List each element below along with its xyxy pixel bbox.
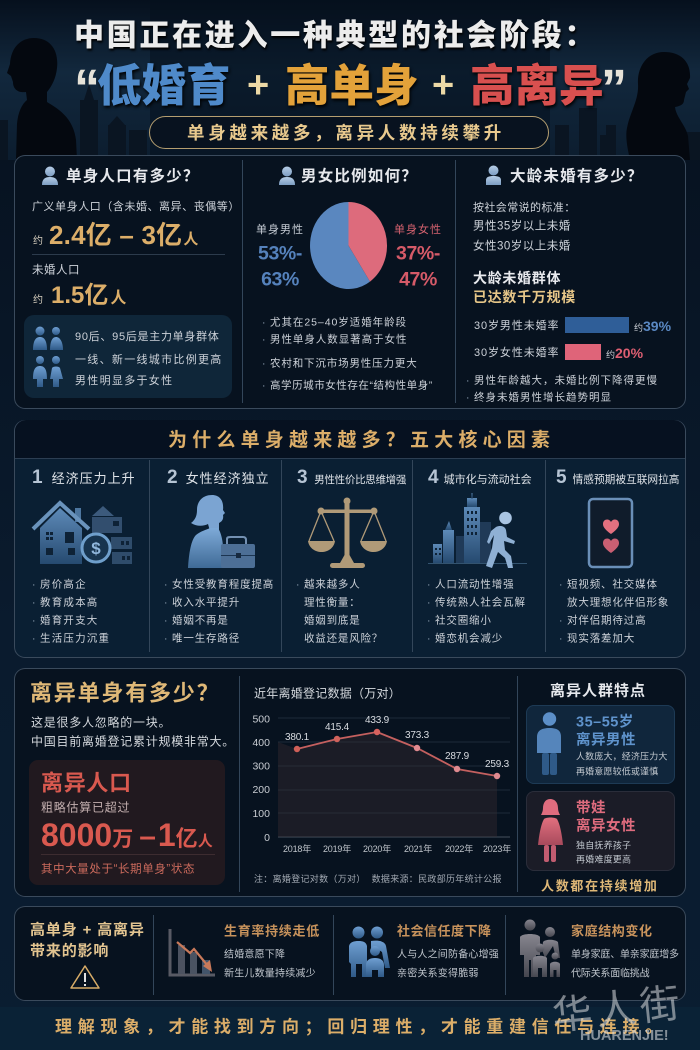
callout: main single groups: [24, 315, 232, 398]
factor 5 bullets: 对伴侣期待过高: [567, 614, 646, 626]
factor 1 bullets: ·: [32, 632, 37, 644]
bullet: men decline slowly: 男性年龄越大，未婚比例下降得更慢: [474, 374, 658, 386]
factor 4 bullets: ·: [427, 632, 431, 644]
stat: men percent: [258, 242, 302, 290]
text: unmarried population: 未婚人口: [32, 265, 80, 277]
impact 3 title: 家庭结构变化: [571, 924, 653, 939]
label: male rate: 30岁男性未婚率: [474, 320, 559, 332]
factor 1 bullets: ·: [32, 614, 37, 626]
text: city ratio: 一线、新一线城市比例更高: [75, 354, 223, 366]
keyword: low marriage and birth: 低婚育: [97, 62, 231, 111]
factor 3 bullets: 婚姻到底是: [304, 614, 360, 626]
bullet: lifelong unmarried men: 终身未婚男性增长趋势明显: [474, 392, 612, 404]
callout note: 其中大量处于“长期单身”状态: [41, 864, 195, 876]
impact 3 text: 单身家庭、单亲家庭增多: [571, 949, 679, 960]
impact 1 text: [224, 945, 316, 983]
impact 3 text: 代际关系面临挑战: [571, 968, 649, 979]
impact 2 text: [397, 945, 499, 983]
factor 4 bullets: 传统熟人社会瓦解: [435, 596, 526, 608]
factor 5 bullets: [559, 578, 669, 644]
factor 1 header: 1 经济压力上升: [32, 467, 136, 488]
factor 5 bullets: 短视频、社交媒体: [567, 578, 658, 590]
factor 4 header: 4 城市化与流动社会: [428, 467, 532, 488]
impact 1 text: 结婚意愿下降: [224, 949, 285, 960]
text: female standard: 女性30岁以上未婚: [473, 241, 571, 253]
bar: female: [565, 344, 601, 360]
bullets: gender notes: ·: [262, 316, 266, 328]
line chart: divorce registrations: [252, 714, 511, 854]
icon: people group: [33, 326, 63, 387]
text: scale highlight: 已达数千万规模: [473, 289, 576, 305]
card text: 再婚意愿较低或谨慎: [576, 766, 658, 776]
bullet: ·: [262, 358, 266, 370]
line chart: divorce registrations: 200: [252, 784, 270, 796]
label: single men: 单身男性: [256, 224, 304, 236]
factor 4 bullets: 人口流动性增强: [435, 578, 514, 590]
stat: women percent: 47%: [399, 268, 437, 290]
factor 4 bullets: ·: [427, 614, 431, 626]
stat: women percent: 37%-: [396, 242, 440, 264]
icon: house and money: $: [91, 539, 101, 558]
value: male: 约39%: [634, 318, 671, 334]
heading: how many divorced: 离异单身有多少？: [30, 680, 220, 705]
line chart: divorce registrations: 433.9: [365, 715, 390, 726]
icon: person: [279, 166, 295, 185]
line chart: divorce registrations: 380.1: [285, 732, 310, 743]
impact 3 text: [571, 945, 679, 983]
stat: 80 to 100 million: 8000万–1亿人: [41, 817, 213, 853]
keyword: high divorce: 高离异: [470, 62, 604, 111]
stat: women percent: [396, 242, 440, 290]
bar chart: unmarried rates at 30: [474, 317, 671, 361]
panel: single population overview: [14, 155, 686, 409]
line chart: divorce registrations: 2021年: [404, 843, 432, 854]
impact 2 text: 亲密关系变得脆弱: [397, 968, 479, 979]
factor 1 bullets: 生活压力沉重: [40, 632, 110, 644]
panel: impact: [14, 906, 686, 1001]
factor 5 bullets: 放大理想化伴侣形象: [567, 596, 669, 608]
factor 2 header: 2 女性经济独立: [167, 467, 270, 488]
factor 3 bullets: 理性衡量：: [304, 596, 360, 608]
callout: divorced population: [29, 760, 225, 885]
factor 5 bullets: 现实落差加大: [567, 632, 635, 644]
factor 2 bullets: 唯一生存路径: [172, 632, 240, 644]
heading: divorced group traits: 离异人群特点: [550, 682, 646, 700]
factor 1 bullets: 婚育开支大: [40, 614, 98, 626]
icon: family gray: [518, 918, 562, 980]
line chart: divorce registrations: 2022年: [445, 843, 473, 854]
stat: men percent: 63%: [261, 268, 299, 290]
factor 2 bullets: 女性受教育程度提高: [172, 578, 274, 590]
bar: male: [565, 317, 629, 333]
bullet: 农村和下沉市场男性压力更大: [270, 358, 418, 370]
keyword: high singlehood: 高单身: [285, 62, 419, 111]
factor 1 bullets: ·: [32, 596, 37, 608]
line chart: divorce registrations: 2018年: [283, 843, 311, 854]
card text: 人数庞大，经济压力大: [576, 752, 668, 762]
watermark: [550, 985, 690, 1045]
factor 3 bullets: ·: [296, 578, 300, 590]
card: divorced mothers: [526, 791, 675, 871]
card title: 离异女性: [576, 818, 636, 834]
icon: warning triangle: [70, 964, 102, 991]
panel: divorced singles: [14, 668, 686, 897]
impact 2 text: 人与人之间防备心增强: [397, 949, 499, 960]
icon: person: [486, 166, 501, 185]
line chart: divorce registrations: 0: [264, 832, 270, 844]
line chart: divorce registrations: 415.4: [325, 722, 350, 733]
label: single women: 单身女性: [394, 224, 442, 236]
bullet: lifelong unmarried men: ·: [466, 392, 470, 404]
bullet: men decline slowly: ·: [466, 374, 470, 386]
stat: 2.4 to 300 million: 约2.4亿 – 3亿人: [33, 219, 198, 249]
text: male standard: 男性35岁以上未婚: [473, 221, 571, 233]
title line 1: 中国正在进入一种典型的社会阶段：: [74, 20, 597, 52]
text: social standard: 按社会常说的标准：: [473, 202, 576, 214]
icon: man: [537, 712, 561, 775]
factor 5 bullets: ·: [559, 632, 563, 644]
factor 1 bullets: 房价高企: [40, 578, 87, 590]
watermark characters: 华人街: [550, 981, 686, 1039]
line chart: divorce registrations: 300: [252, 760, 270, 772]
chart heading: 近年离婚登记数据（万对）: [254, 686, 401, 700]
icon: city and walker: [428, 493, 527, 568]
factor 1 bullets: ·: [32, 578, 37, 590]
heading: impact: 高单身 + 高离异: [30, 922, 145, 938]
heading: older unmarried: 大龄未婚有多少？: [510, 168, 644, 185]
text: group description: 90后、95后是主力单身群体: [75, 331, 220, 343]
icon: family blue: [347, 924, 391, 979]
impact 1 title: 生育率持续走低: [224, 924, 320, 939]
factor 3 bullets: 收益还是风险？: [304, 632, 383, 644]
text: overlooked intro: 这是很多人忽略的一块。: [31, 715, 171, 729]
line chart: divorce registrations: 2023年: [483, 843, 511, 854]
line chart: divorce registrations: 259.3: [485, 759, 510, 770]
card title: 35–55岁: [576, 714, 634, 730]
factor 4 bullets: ·: [427, 578, 431, 590]
icon: woman: [536, 798, 566, 864]
opening quote: “: [74, 59, 100, 117]
card: divorced men: [526, 705, 675, 784]
text: overlooked intro: 中国目前离婚登记累计规模非常大。: [31, 734, 235, 748]
line chart: divorce registrations: 2020年: [363, 843, 391, 854]
card text: [576, 750, 668, 780]
subtitle text: 单身越来越多，离异人数持续攀升: [187, 123, 505, 143]
line chart: divorce registrations: 287.9: [445, 751, 470, 762]
card title: [576, 713, 636, 749]
factor 3 bullets: 越来越多人: [304, 578, 360, 590]
bullet: ·: [262, 334, 266, 346]
icon: person: [42, 166, 58, 185]
icon: house and money: [32, 500, 132, 564]
line chart: divorce registrations: 500: [252, 714, 270, 726]
bullet: 高学历城市女性存在“结构性单身”: [270, 380, 433, 392]
card title: 带娃: [576, 800, 606, 816]
text: overlooked intro: [31, 715, 235, 748]
heading: impact: [30, 920, 145, 962]
line chart: divorce registrations: 373.3: [405, 730, 430, 741]
text: both growing: 人数都在持续增加: [541, 879, 659, 894]
card text: 独自抚养孩子: [576, 840, 631, 850]
factor 3 header: 3 男性性价比思维增强: [297, 467, 406, 488]
icon: working woman: [188, 495, 255, 568]
factor 3 bullets: [296, 578, 383, 644]
footer message: 理解现象，才能找到方向；回归理性，才能重建信任与连接。: [55, 1017, 668, 1036]
factor 2 bullets: 收入水平提升: [172, 596, 240, 608]
title line 2: [74, 59, 627, 117]
footer band: [0, 1007, 700, 1050]
stat: 150 million: 约 1.5亿人: [33, 282, 126, 309]
factor 2 bullets: ·: [164, 596, 168, 608]
factor 5 header: 5 情感预期被互联网拉高: [556, 467, 679, 488]
watermark latin: HUARENJIE!: [580, 1028, 669, 1044]
heading: impact: 带来的影响: [30, 942, 109, 960]
factor 1 bullets: [32, 578, 110, 644]
heading: gender ratio: 男女比例如何？: [301, 168, 418, 185]
heading: how many singles: 单身人口有多少？: [66, 168, 200, 185]
label: female rate: 30岁女性未婚率: [474, 347, 559, 359]
factor 4 bullets: 社交圈缩小: [435, 614, 492, 626]
text: broad definition: 广义单身人口（含未婚、离异、丧偶等）: [32, 201, 240, 213]
bullet: ·: [262, 380, 266, 392]
factor 4 bullets: [427, 578, 526, 644]
plus sign: +: [432, 65, 454, 107]
header background: night skyline with silhouettes: [0, 20, 700, 160]
heading: why more singles: 为什么单身越来越多？五大核心因素: [168, 430, 555, 451]
bullet: 男性单身人数显著高于女性: [270, 334, 407, 346]
bullets: gender notes: 尤其在25–40岁适婚年龄段: [270, 316, 407, 328]
card title: [576, 800, 636, 836]
factor 4 bullets: 婚恋机会减少: [435, 632, 503, 644]
icon: phone with hearts: [588, 498, 634, 568]
impact 1 text: 新生儿数量持续减少: [224, 968, 316, 979]
factor 1 bullets: 教育成本高: [40, 596, 98, 608]
icon: falling chart: [168, 921, 217, 978]
line chart: divorce registrations: 400: [252, 737, 270, 749]
subtitle pill: [149, 116, 549, 149]
line chart: divorce registrations: 2019年: [323, 843, 351, 854]
callout heading: 离异人口: [41, 770, 132, 795]
card title: 离异男性: [576, 732, 636, 748]
callout text: 粗略估算已超过: [41, 800, 130, 814]
factor 5 bullets: ·: [559, 614, 563, 626]
factor 2 bullets: ·: [164, 614, 168, 626]
closing quote: ”: [601, 59, 627, 117]
factor 2 bullets: [164, 578, 274, 644]
text: tens of millions: 大龄未婚群体: [473, 270, 561, 286]
factor 2 bullets: ·: [164, 578, 168, 590]
plus sign: +: [247, 65, 269, 107]
text: men outnumber women: 男性明显多于女性: [75, 375, 173, 387]
chart footnote: 注：离婚登记对数（万对） 数据来源：民政部历年统计公报: [254, 874, 502, 884]
factor 2 bullets: 婚姻不再是: [172, 614, 229, 626]
value: female: 约20%: [606, 345, 643, 361]
pie chart: single men vs women: [310, 202, 387, 289]
silhouette: woman: [626, 52, 690, 160]
card text: 再婚难度更高: [576, 854, 631, 864]
stat: men percent: 53%-: [258, 242, 302, 264]
panel: five core factors: [14, 420, 686, 658]
icon: balance scale: [308, 498, 387, 568]
impact 2 title: 社会信任度下降: [397, 924, 492, 939]
card text: [576, 838, 631, 866]
silhouette: man: [7, 38, 77, 160]
factor 2 bullets: ·: [164, 632, 168, 644]
factor 4 bullets: ·: [427, 596, 431, 608]
factor 5 bullets: ·: [559, 578, 563, 590]
line chart: divorce registrations: 100: [252, 808, 270, 820]
